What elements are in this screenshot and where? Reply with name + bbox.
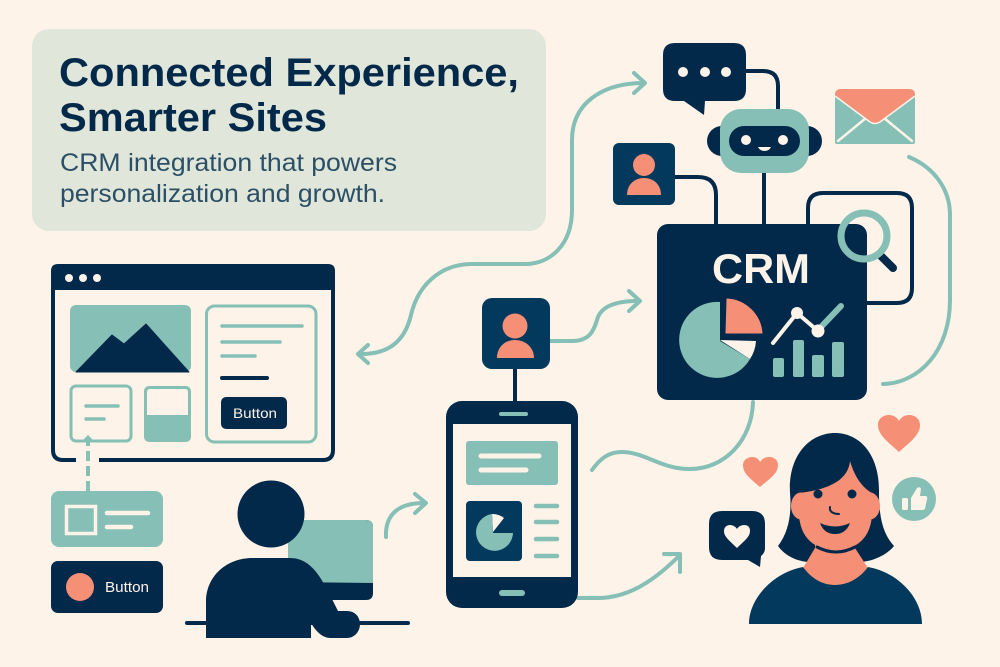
website window: [51, 264, 335, 460]
person at computer: [187, 480, 408, 638]
navy button: [51, 561, 163, 613]
smile: [820, 523, 850, 534]
robot: [707, 109, 822, 173]
subtitle: CRM integration that powers: [60, 149, 397, 177]
desk: [187, 621, 408, 625]
nose: [830, 507, 839, 514]
phone header card: [466, 441, 558, 485]
bar chart: [773, 340, 844, 377]
title panel: [32, 29, 546, 231]
phone: [446, 369, 578, 608]
body: [206, 558, 360, 638]
eyes: [814, 490, 856, 498]
hair: [778, 433, 894, 562]
text card with button: [206, 306, 316, 442]
head: [238, 480, 304, 548]
ears: [791, 492, 880, 520]
neck: [803, 540, 868, 586]
chat bubble: [663, 43, 746, 115]
email envelope: [835, 89, 915, 144]
navy button: Button: [105, 580, 149, 596]
icon: thumbs up: [892, 477, 936, 521]
subtitle: personalization and growth.: [60, 180, 385, 208]
icon: small heart: [743, 457, 778, 487]
jaw line: [817, 547, 855, 552]
button: Button: [233, 405, 277, 421]
customer illustration: [749, 433, 922, 624]
image placeholder: [70, 305, 191, 372]
user tile above phone: [482, 298, 550, 369]
face: [799, 461, 872, 550]
CRM dashboard: [657, 224, 867, 400]
subtitle: [60, 149, 397, 208]
line chart: [773, 306, 841, 343]
arrow: phone to customer: [578, 554, 680, 598]
arrow: user to CRM: [551, 291, 640, 341]
icon: large heart: [878, 415, 920, 452]
phone pie chart: [466, 501, 522, 561]
torso: [749, 567, 922, 624]
user tile: [613, 143, 675, 205]
arrow tip: towards chat: [634, 73, 645, 93]
monitor: [288, 520, 373, 600]
dashed connector: [82, 435, 94, 491]
connector: user to phone: [513, 369, 517, 401]
arrow: CRM to website: [358, 83, 644, 363]
connector lines to CRM: [675, 71, 912, 303]
window title bar: [51, 264, 335, 290]
icon: heart speech bubble: [709, 511, 765, 567]
half-filled card: [144, 386, 191, 442]
heading: [59, 51, 519, 140]
CRM label: CRM: [712, 245, 810, 292]
arrow: person to phone: [386, 494, 426, 537]
heading: Smarter Sites: [59, 96, 327, 140]
pie chart: [679, 299, 762, 378]
magnifying glass: [841, 213, 893, 268]
heading: Connected Experience,: [59, 51, 519, 95]
phone list lines: [536, 506, 557, 556]
small text card: [71, 386, 131, 441]
curve: CRM to phone: [592, 402, 753, 470]
teal content card: [51, 491, 163, 547]
curve: email to CRM: [883, 157, 950, 384]
connector arrows: [358, 73, 950, 598]
